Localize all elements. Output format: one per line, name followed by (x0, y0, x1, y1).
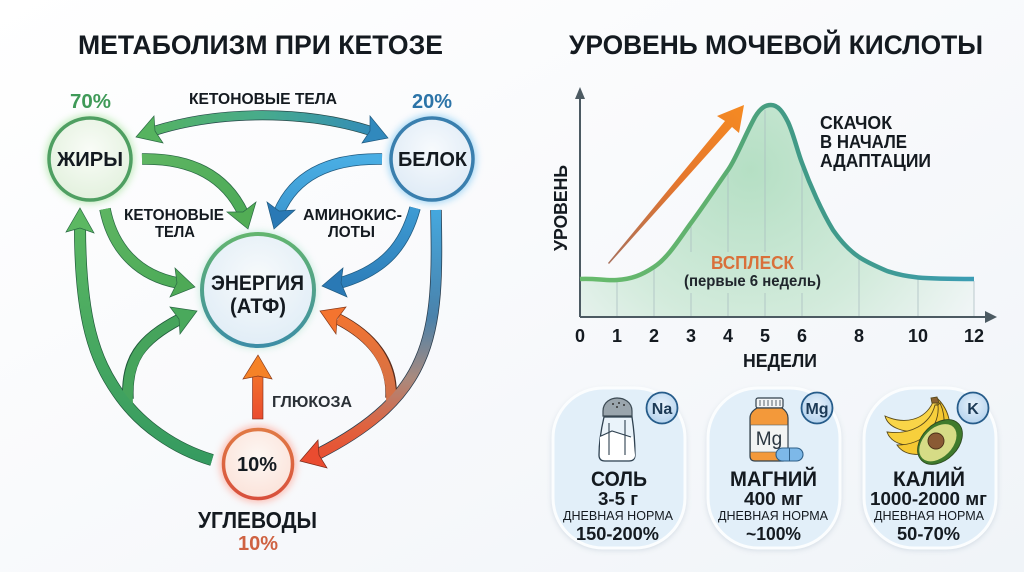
title: metabolism: МЕТАБОЛИЗМ ПРИ КЕТОЗЕ (78, 30, 443, 60)
x axis numbers: 2 (649, 326, 659, 346)
label: ketone bodies left: КЕТОНОВЫЕ (124, 207, 224, 224)
label: ketone bodies top: КЕТОНОВЫЕ ТЕЛА (189, 91, 337, 108)
node: energy (200, 232, 316, 348)
panel: salt (552, 388, 686, 550)
node: fats (46, 115, 134, 203)
callout: spike at adaptation start: В НАЧАЛЕ (820, 132, 907, 152)
arrow: glucose (243, 355, 272, 419)
card text: salt: 3-5 г (598, 489, 639, 509)
label: amino acids (303, 207, 402, 241)
label: surge: ВСПЛЕСК (711, 253, 795, 273)
panel: metabolism diagram (46, 91, 476, 555)
card text: magnesium (718, 467, 829, 544)
x axis numbers: 0 (575, 326, 585, 346)
panel: magnesium (707, 388, 841, 550)
arrow: protein to energy lower (322, 208, 415, 297)
badge: K (958, 392, 988, 424)
badge: Na: Na (652, 401, 672, 418)
callout: spike at adaptation start: АДАПТАЦИИ (820, 151, 931, 171)
x axis numbers: 10 (908, 326, 928, 346)
y axis label: УРОВЕНЬ (551, 165, 571, 251)
node: energy: (АТФ) (230, 295, 286, 318)
chart area fill (580, 105, 974, 317)
arrow: fats to energy lower (105, 209, 195, 297)
x axis numbers: 5 (760, 326, 770, 346)
label: ketone bodies left: ТЕЛА (155, 224, 195, 241)
node: protein: БЕЛОК (398, 149, 468, 171)
x axis numbers: 6 (797, 326, 807, 346)
node: fats: ЖИРЫ (56, 149, 123, 171)
x axis numbers: 1 (612, 326, 622, 346)
label: ketone bodies left (124, 207, 224, 241)
label: amino acids: АМИНОКИС- (303, 207, 402, 224)
icon: bananas and avocado (885, 397, 971, 473)
arrow: ketone bodies double arrow (136, 115, 388, 143)
label: first six weeks: (первые 6 недель) (684, 273, 821, 290)
arrow: fats to energy upper (142, 159, 256, 229)
label: protein share: 20% (412, 91, 452, 113)
x axis numbers: 8 (854, 326, 864, 346)
arrows: protein to carbohydrates and energy (right branch) (300, 210, 436, 468)
label: fats share: 70% (70, 91, 111, 113)
card text: potassium: ДНЕВНАЯ НОРМА (874, 509, 985, 523)
arrow: rise (608, 105, 744, 264)
title: uric acid: УРОВЕНЬ МОЧЕВОЙ КИСЛОТЫ (569, 29, 983, 60)
node: carbohydrates: 10% (237, 454, 277, 476)
card text: magnesium: ~100% (746, 524, 801, 544)
badge: K: K (967, 401, 979, 418)
callout: spike at adaptation start: СКАЧОК (820, 113, 893, 133)
label: carbohydrates: УГЛЕВОДЫ (198, 507, 317, 533)
chart curve (580, 105, 974, 280)
node: energy: ЭНЕРГИЯ (211, 272, 304, 295)
x axis numbers: 12 (964, 326, 984, 346)
card text: magnesium: 400 мг (744, 489, 804, 509)
callout: spike at adaptation start (820, 113, 931, 171)
badge: Na (646, 392, 678, 424)
line chart: uric acid level (551, 87, 997, 371)
icon: pill bottle (750, 398, 803, 461)
arrows: carbohydrates to fats and energy (left branch) (66, 208, 212, 460)
card text: salt: 150-200% (576, 524, 659, 544)
icon: salt shaker (599, 398, 635, 461)
x axis numbers: 4 (723, 326, 733, 346)
card text: salt: ДНЕВНАЯ НОРМА (563, 509, 674, 523)
badge: Mg: Mg (805, 401, 829, 418)
label: carbohydrates share: 10% (238, 533, 278, 555)
label: amino acids: ЛОТЫ (328, 224, 375, 241)
icon: pill bottle: Mg (756, 429, 782, 450)
badge: Mg (802, 392, 832, 424)
arrow: protein to energy upper (267, 159, 382, 229)
node: protein (388, 115, 476, 203)
x axis numbers (575, 326, 984, 346)
card text: potassium: КАЛИЙ (893, 467, 965, 491)
card text: potassium (870, 467, 988, 544)
label: glucose: ГЛЮКОЗА (272, 394, 352, 411)
node: carbohydrates (220, 426, 296, 502)
card text: salt (563, 468, 674, 544)
panel: potassium (863, 388, 997, 550)
card text: potassium: 1000-2000 мг (870, 489, 988, 509)
card text: magnesium: ДНЕВНАЯ НОРМА (718, 509, 829, 523)
chart axes (575, 87, 997, 323)
x axis numbers: 3 (686, 326, 696, 346)
x axis label: НЕДЕЛИ (743, 351, 817, 371)
card text: magnesium: МАГНИЙ (730, 467, 817, 491)
card text: potassium: 50-70% (897, 524, 960, 544)
card text: salt: СОЛЬ (591, 468, 647, 491)
